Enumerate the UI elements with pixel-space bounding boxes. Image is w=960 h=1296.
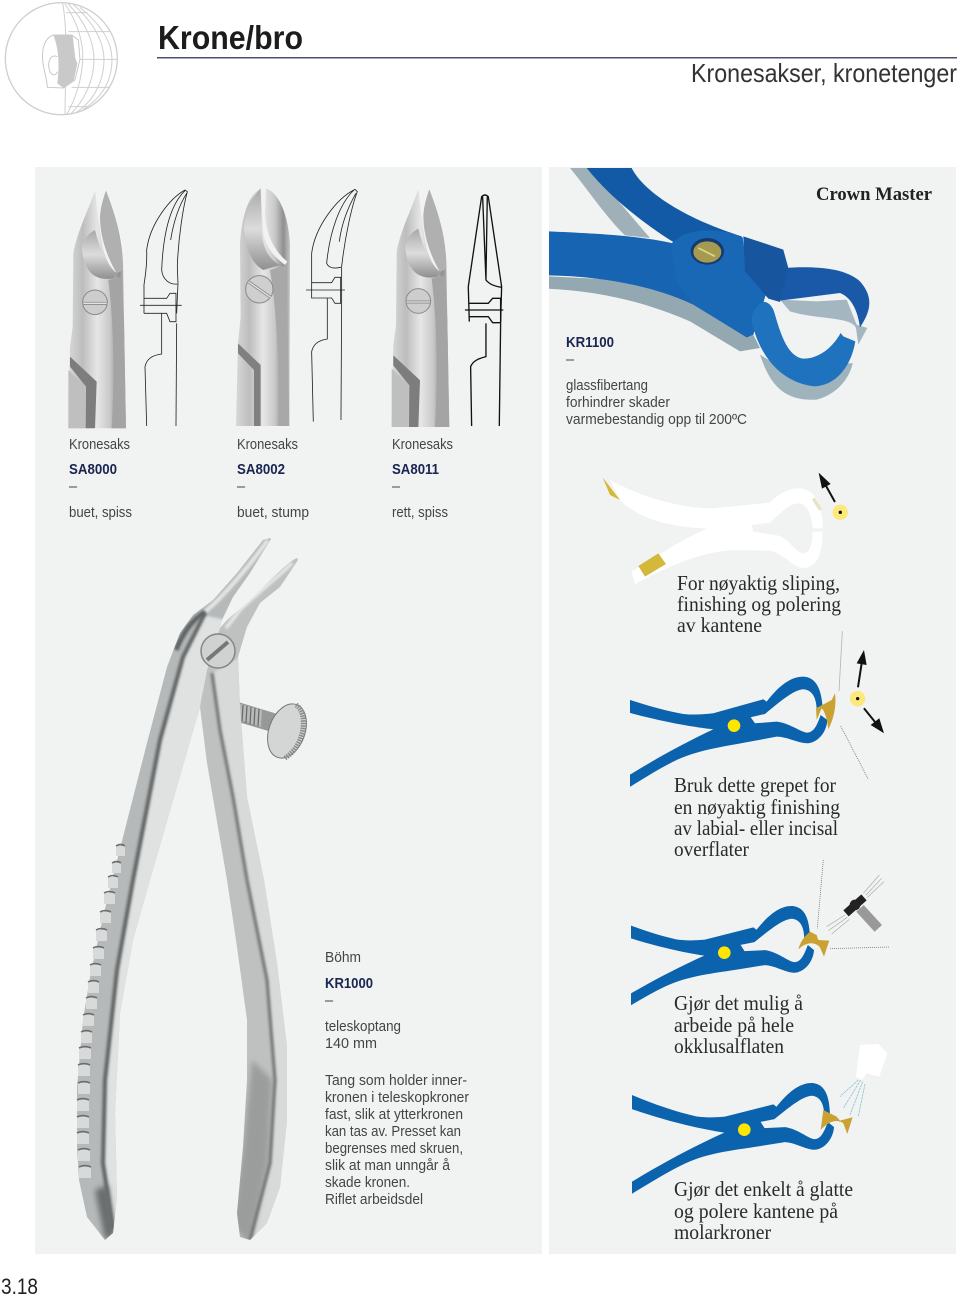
drawing: scissors SA8000	[140, 190, 187, 426]
diagram: blue pliers labial	[630, 676, 836, 787]
caption: occlusal: Gjør det mulig å	[674, 991, 804, 1015]
right arm	[200, 558, 298, 1240]
photo: KR1000 teleskoptang	[70, 530, 313, 1250]
arrow	[819, 473, 835, 502]
text: SA8011: Kronesaks	[392, 437, 453, 453]
caption: molar: Gjør det enkelt å glatte	[674, 1177, 853, 1201]
drawing: scissors SA8002	[306, 189, 357, 422]
text: SA8002	[237, 437, 309, 521]
text: KR1000: kronen i teleskopkroner	[325, 1090, 469, 1106]
grip ribs	[77, 844, 125, 1178]
text: KR1100: –	[566, 352, 575, 368]
text: KR1100	[566, 335, 747, 428]
diagram: white pliers with target	[603, 473, 848, 584]
caption: sliping: av kantene	[677, 613, 762, 637]
text: KR1000: Riflet arbeidsdel	[325, 1192, 423, 1208]
panel: left background	[35, 167, 542, 1254]
text: KR1100: varmebestandig opp til 200ºC	[566, 412, 747, 428]
target dot	[833, 505, 848, 520]
lower hook	[752, 302, 855, 386]
text: SA8002: Kronesaks	[237, 437, 298, 453]
diagram: blue pliers molar	[632, 1083, 834, 1194]
caption: labial: overflater	[674, 837, 749, 861]
screw stalk	[196, 690, 313, 763]
text: KR1000	[325, 950, 469, 1208]
pivot screw	[201, 634, 235, 668]
text: KR1000: kan tas av. Presset kan	[325, 1124, 461, 1140]
caption: occlusal: okklusalflaten	[674, 1034, 784, 1058]
drawing: scissors SA8011	[465, 195, 503, 426]
text: KR1000: Böhm	[325, 950, 361, 966]
caption: sliping	[677, 571, 841, 637]
text: SA8000	[69, 437, 132, 521]
text: SA8002: –	[237, 479, 246, 495]
text: KR1100: KR1100	[566, 335, 614, 351]
title rule	[157, 57, 957, 58]
text: KR1100: glassfibertang	[566, 378, 648, 394]
photo: scissors SA8002	[236, 188, 290, 426]
text: SA8002: buet, stump	[237, 505, 309, 521]
caption: labial	[674, 773, 840, 861]
caption: molar	[674, 1177, 853, 1244]
caption: labial: Bruk dette grepet for	[674, 773, 836, 797]
text: KR1100: forhindrer skader	[566, 395, 670, 411]
caption: molar: molarkroner	[674, 1220, 771, 1244]
photo: scissors SA8011	[392, 189, 449, 427]
label: Crown Master: Crown Master	[816, 185, 932, 205]
caption: sliping: For nøyaktig sliping,	[677, 571, 840, 595]
text: SA8011	[392, 437, 453, 521]
text: SA8002: SA8002	[237, 462, 285, 478]
caption: sliping: finishing og polering	[677, 592, 841, 616]
caption: labial: en nøyaktig finishing	[674, 795, 840, 819]
text: KR1000: 140 mm	[325, 1036, 377, 1052]
text: KR1000: KR1000	[325, 976, 373, 992]
caption: occlusal: arbeide på hele	[674, 1013, 794, 1037]
text: SA8011: SA8011	[392, 462, 439, 478]
text: SA8011: rett, spiss	[392, 505, 448, 521]
text: SA8011: –	[392, 479, 401, 495]
text: KR1000: –	[325, 993, 334, 1009]
diagram: occlusal tooth, guides and brush	[798, 860, 889, 957]
photo: KR1100 blue glass fibre pliers	[548, 168, 869, 400]
text: KR1000: fast, slik at ytterkronen	[325, 1107, 463, 1123]
diagram: blue pliers occlusal	[631, 906, 814, 1006]
diagram: molar tooth and spray nozzle	[821, 1044, 887, 1134]
caption: occlusal	[674, 991, 804, 1058]
left arm	[70, 530, 280, 1250]
text: SA8000: Kronesaks	[69, 437, 130, 453]
text: SA8000: SA8000	[69, 462, 117, 478]
diagram: labial guides and arrows	[839, 632, 884, 779]
text: KR1000: skade kronen.	[325, 1175, 410, 1191]
text: SA8000: –	[69, 479, 78, 495]
title: Krone/bro	[158, 19, 303, 56]
text: SA8000: buet, spiss	[69, 505, 132, 521]
caption: molar: og polere kantene på	[674, 1199, 839, 1223]
text: KR1000: begrenses med skruen,	[325, 1141, 463, 1157]
panel: right background	[549, 167, 956, 1254]
logo: globe with head	[5, 3, 117, 115]
text: KR1000: slik at man unngår å	[325, 1158, 451, 1174]
photo: scissors SA8000	[68, 191, 126, 428]
text: KR1000: Tang som holder inner-	[325, 1073, 467, 1089]
caption: labial: av labial- eller incisal	[674, 816, 838, 840]
text: KR1000: teleskoptang	[325, 1019, 401, 1035]
